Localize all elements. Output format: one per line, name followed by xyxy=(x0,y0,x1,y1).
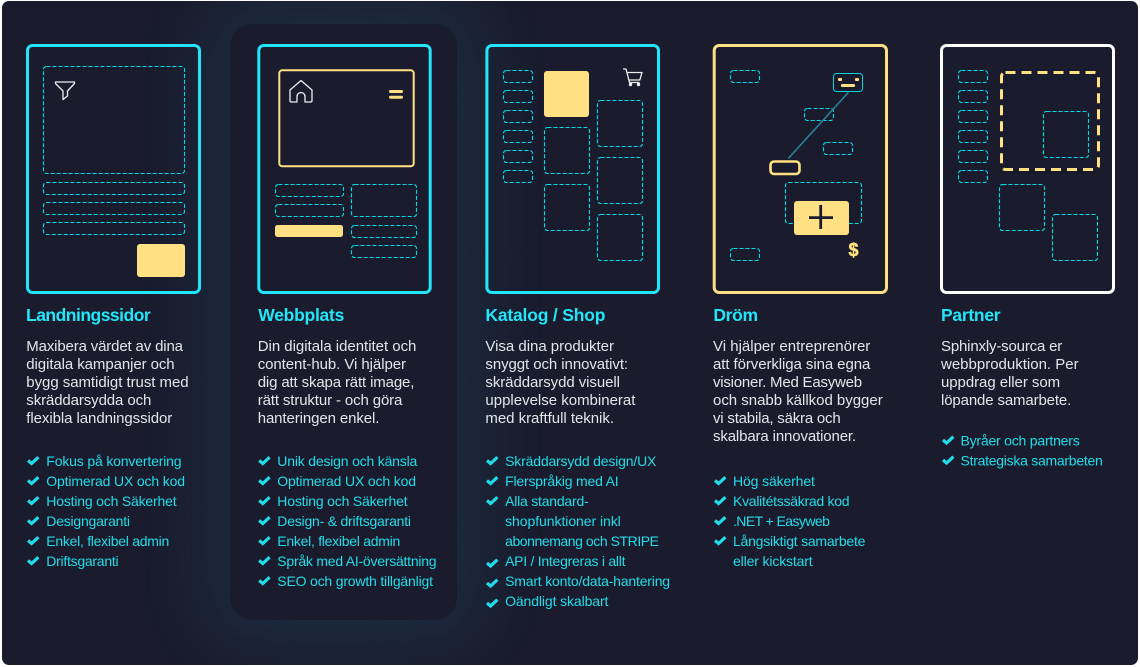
heading: Katalog / Shop: Katalog / Shop xyxy=(485,305,605,325)
description: Landningssidor: flexibla landningssidor xyxy=(26,410,172,427)
description: Katalog / Shop: upplevelse kombinerat xyxy=(485,392,636,409)
description: Landningssidor xyxy=(26,338,189,427)
description: Webbplats: dig att skapa rätt image, xyxy=(258,374,414,391)
checklist: Katalog / Shop: Alla standard- xyxy=(505,493,589,509)
checklist: Webbplats: Hosting och Säkerhet xyxy=(277,493,408,509)
description: Partner: uppdrag eller som xyxy=(941,374,1060,391)
description: Dröm: vi stabila, säkra och xyxy=(713,410,841,427)
column: Katalog / Shop xyxy=(485,46,670,609)
description: Dröm: visioner. Med Easyweb xyxy=(713,374,862,391)
checklist: Dröm: Kvalitétssäkrad kod xyxy=(733,493,850,509)
column: Landningssidor xyxy=(26,46,200,569)
checklist: Landningssidor: Designgaranti xyxy=(46,513,130,529)
heading: Landningssidor: Landningssidor xyxy=(26,305,151,325)
description: Webbplats: hanteringen enkel. xyxy=(258,410,379,427)
icon: robot face xyxy=(834,74,862,92)
description: Partner: webbproduktion. Per xyxy=(940,356,1079,373)
description: Partner: Sphinxly-sourca er xyxy=(941,338,1062,355)
column: Webbplats xyxy=(258,46,437,589)
wireframe: landing page xyxy=(28,46,200,292)
heading: Dröm: Dröm xyxy=(713,305,758,325)
wireframe: catalog xyxy=(487,46,658,292)
checklist: Katalog / Shop: abonnemang och STRIPE xyxy=(505,533,659,549)
description: Webbplats: rätt struktur - och göra xyxy=(258,392,403,409)
icon: menu xyxy=(390,92,402,97)
checklist: Webbplats: Enkel, flexibel admin xyxy=(277,533,400,549)
checklist: Katalog / Shop xyxy=(487,453,670,609)
description: Webbplats: Din digitala identitet och xyxy=(258,338,416,355)
highlighted panel: Webbplats xyxy=(230,24,457,620)
description: Katalog / Shop: skräddarsydd visuell xyxy=(485,374,620,391)
description: Katalog / Shop: snyggt och innovativt: xyxy=(485,356,628,373)
description: Dröm: Vi hjälper entreprenörer xyxy=(713,338,870,355)
heading: Partner: Partner xyxy=(941,305,1001,325)
yellow pill xyxy=(770,162,800,174)
description: Dröm: skalbara innovationer. xyxy=(713,428,856,445)
column: Dröm xyxy=(713,46,886,569)
checklist: Landningssidor: Fokus på konvertering xyxy=(46,453,182,469)
wireframe: partner xyxy=(942,46,1114,292)
checklist: Katalog / Shop: Skräddarsydd design/UX xyxy=(505,453,657,469)
description: Landningssidor: Maxibera värdet av dina xyxy=(26,338,184,355)
description: Landningssidor: digitala kampanjer och xyxy=(26,356,175,373)
checklist: Dröm: Långsiktigt samarbete xyxy=(733,533,866,549)
checklist: Webbplats: Unik design och känsla xyxy=(277,453,418,469)
connector line xyxy=(788,92,848,158)
wireframe: dream xyxy=(714,46,886,292)
checklist: Dröm: Hög säkerhet xyxy=(733,473,815,489)
icon: house xyxy=(290,80,312,102)
yellow dashed frame xyxy=(1002,72,1098,170)
description: Dröm: att förverkliga sina egna xyxy=(713,356,871,373)
checklist: Landningssidor: Optimerad UX och kod xyxy=(46,473,185,489)
description: Dröm xyxy=(713,338,883,445)
checklist: Webbplats: SEO och growth tillgänligt xyxy=(277,573,433,589)
checklist: Dröm: eller kickstart xyxy=(733,553,813,569)
description: Webbplats xyxy=(258,338,416,427)
description: Partner: löpande samarbete. xyxy=(941,392,1071,409)
wireframe: website xyxy=(259,46,430,292)
checklist: Dröm xyxy=(715,473,866,569)
icon: dollar: $ xyxy=(848,240,859,260)
description: Dröm: och snabb källkod bygger xyxy=(713,392,883,409)
checklist: Webbplats: Design- & driftsgaranti xyxy=(277,513,411,529)
checklist: Webbplats: Språk med AI-översättning xyxy=(277,553,437,569)
yellow plus button xyxy=(794,201,849,235)
checklist: Landningssidor: Hosting och Säkerhet xyxy=(46,493,177,509)
checklist: Dröm: .NET + Easyweb xyxy=(733,513,830,529)
description: Katalog / Shop: med kraftfull teknik. xyxy=(485,410,614,427)
icon: shopping cart xyxy=(623,69,642,86)
checklist: Webbplats: Optimerad UX och kod xyxy=(277,473,416,489)
yellow call-to-action button xyxy=(137,244,185,277)
yellow hero frame xyxy=(279,70,414,166)
checklist: Katalog / Shop: Smart konto/data-hantering xyxy=(505,573,670,589)
checklist: Landningssidor: Enkel, flexibel admin xyxy=(46,533,169,549)
checklist: Katalog / Shop: shopfunktioner inkl xyxy=(505,513,621,529)
description: Webbplats: content-hub. Vi hjälper xyxy=(258,356,406,373)
checklist: Partner xyxy=(943,432,1103,468)
checklist: Landningssidor: Driftsgaranti xyxy=(46,553,119,569)
checklist: Landningssidor xyxy=(28,453,185,569)
icon: funnel xyxy=(56,82,74,100)
checklist: Katalog / Shop: Flerspråkig med AI xyxy=(505,473,619,489)
heading: Webbplats: Webbplats xyxy=(258,305,345,325)
description: Landningssidor: skräddarsydda och xyxy=(26,392,151,409)
checklist: Webbplats xyxy=(259,453,437,589)
description: Katalog / Shop: Visa dina produkter xyxy=(485,338,614,355)
checklist: Partner: Strategiska samarbeten xyxy=(960,452,1103,468)
description: Landningssidor: bygg samtidigt trust med xyxy=(26,374,189,391)
checklist: Partner: Byråer och partners xyxy=(960,432,1080,448)
checklist: Katalog / Shop: Oändligt skalbart xyxy=(505,593,609,609)
checklist: Katalog / Shop: API / Integreras i allt xyxy=(505,553,626,569)
column: Partner xyxy=(940,46,1114,468)
description: Partner xyxy=(940,338,1079,409)
yellow product tile xyxy=(544,71,589,117)
description: Katalog / Shop xyxy=(485,338,636,427)
